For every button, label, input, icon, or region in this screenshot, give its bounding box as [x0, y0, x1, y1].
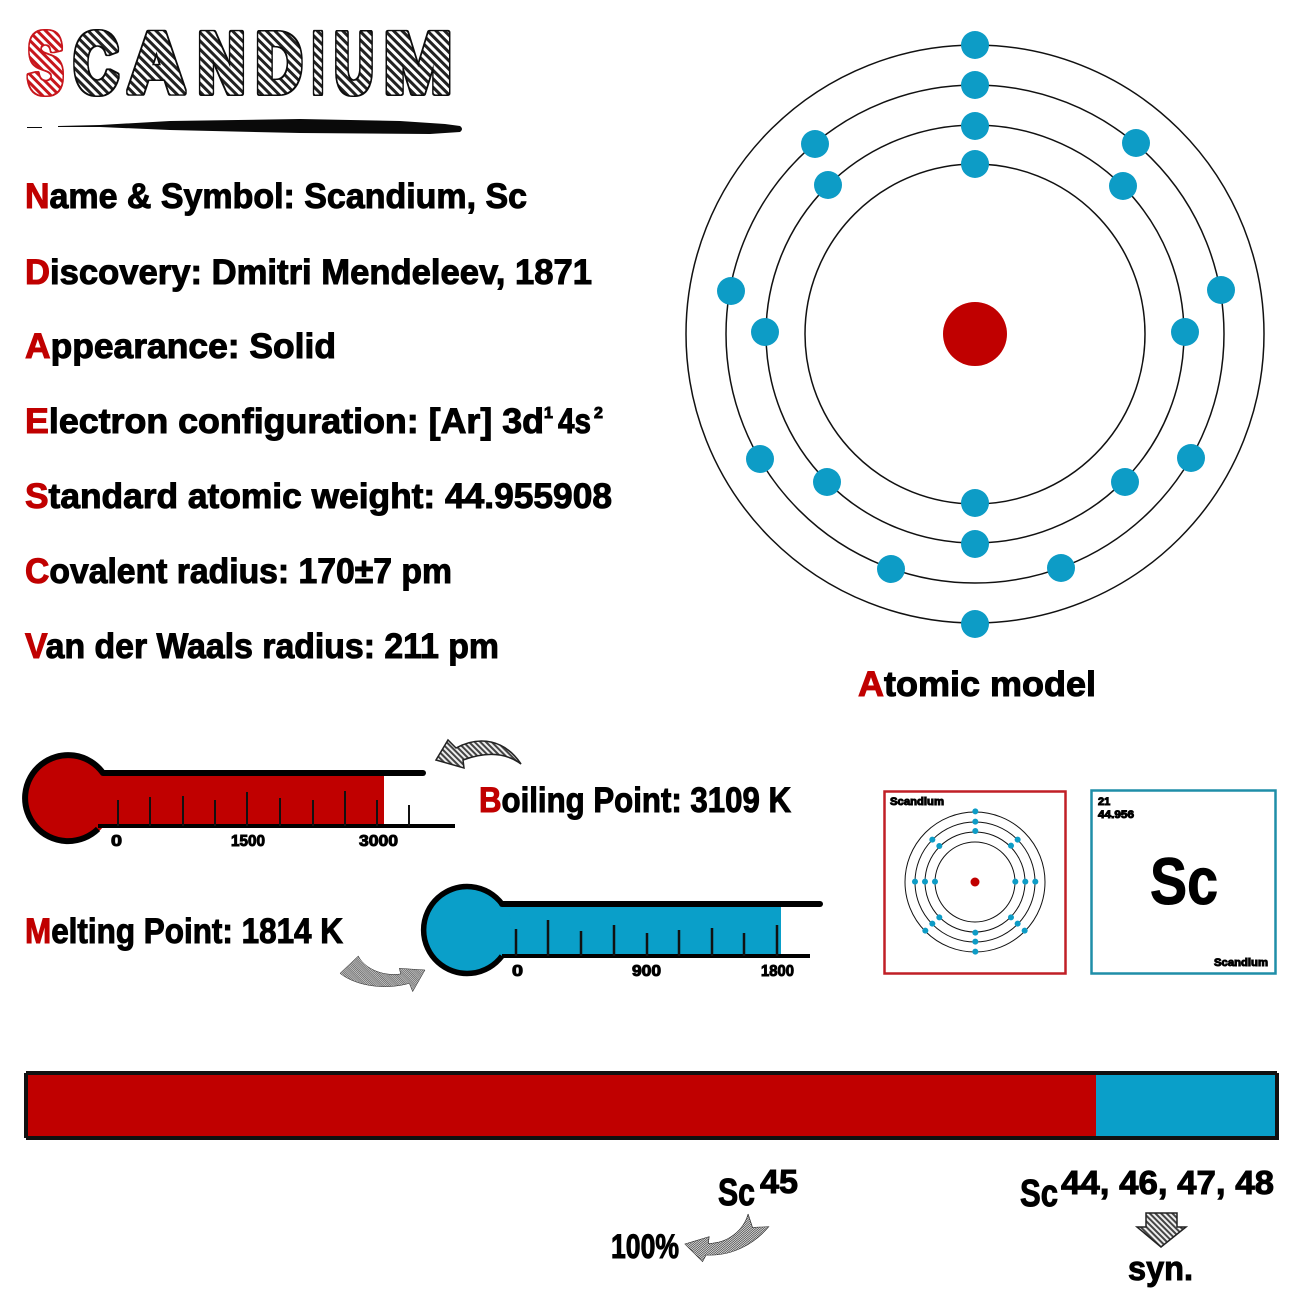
- title: [28, 16, 452, 110]
- title: A: [128, 16, 185, 110]
- electron configuration: 2: [594, 405, 603, 422]
- arrow: melting point: [340, 956, 425, 992]
- title: U: [335, 16, 373, 110]
- title: M: [384, 16, 452, 110]
- atomic model diagram: [686, 31, 1264, 638]
- melting point label: Melting Point: 1814 K: [25, 912, 343, 951]
- boiling point thermometer: 3000: [359, 833, 398, 850]
- electron configuration: Electron configuration: [Ar] 3d: [25, 402, 544, 441]
- melting point thermometer: 0: [512, 963, 523, 980]
- name and symbol: Name & Symbol: Scandium, Sc: [25, 177, 527, 216]
- boiling point thermometer: 0: [111, 833, 122, 850]
- standard atomic weight: Standard atomic weight: 44.955908: [25, 477, 612, 516]
- isotope abundance bar: [26, 1073, 1279, 1138]
- card: periodic table tile: [1092, 790, 1276, 974]
- melting point thermometer: 900: [632, 963, 661, 980]
- appearance: Appearance: Solid: [25, 327, 336, 366]
- melting point thermometer: [424, 886, 820, 980]
- electrons: [717, 31, 1235, 638]
- isotope label: synthetic isotopes: [1020, 1164, 1274, 1215]
- arrow: boiling point: [436, 740, 521, 768]
- van der waals radius: Van der Waals radius: 211 pm: [25, 627, 499, 666]
- boiling point label: Boiling Point: 3109 K: [479, 781, 791, 820]
- isotope label: synthetic isotopes: Sc: [1020, 1173, 1058, 1215]
- arrow: Sc45 to 100%: [685, 1214, 769, 1262]
- card: periodic table tile: 21: [1098, 796, 1110, 808]
- boiling point thermometer: [25, 755, 455, 850]
- isotope label: Sc45: Sc: [718, 1172, 755, 1214]
- card: periodic table tile: 44.956: [1098, 809, 1134, 821]
- electron configuration: 4s: [558, 402, 591, 441]
- isotope label: Sc45: 45: [760, 1163, 798, 1200]
- isotope label: synthetic isotopes: 44, 46, 47, 48: [1061, 1164, 1274, 1201]
- card: atomic model thumbnail: [884, 792, 1066, 974]
- boiling point thermometer: 1500: [231, 833, 265, 850]
- card: periodic table tile: Scandium: [1214, 957, 1268, 969]
- properties text block: [25, 177, 612, 666]
- arrow: down to syn.: [1137, 1213, 1186, 1247]
- synthetic label: syn.: [1128, 1250, 1193, 1288]
- title: N: [198, 16, 245, 110]
- title: D: [256, 16, 302, 110]
- nucleus: [943, 302, 1007, 366]
- electron configuration: 1: [544, 405, 553, 422]
- abundance label: 100%: 100%: [611, 1228, 679, 1266]
- card: periodic table tile: Sc: [1150, 844, 1218, 918]
- covalent radius: Covalent radius: 170±7 pm: [25, 552, 452, 591]
- atomic model caption: Atomic model: [858, 665, 1096, 704]
- title: I: [313, 16, 323, 110]
- title underline brush stroke: [27, 119, 462, 134]
- isotope label: Sc45: [718, 1163, 798, 1214]
- melting point thermometer: 1800: [761, 963, 794, 980]
- card: atomic model thumbnail: Scandium: [890, 796, 944, 808]
- title: S: [28, 16, 63, 110]
- title: C: [74, 16, 118, 110]
- discovery: Discovery: Dmitri Mendeleev, 1871: [25, 253, 592, 292]
